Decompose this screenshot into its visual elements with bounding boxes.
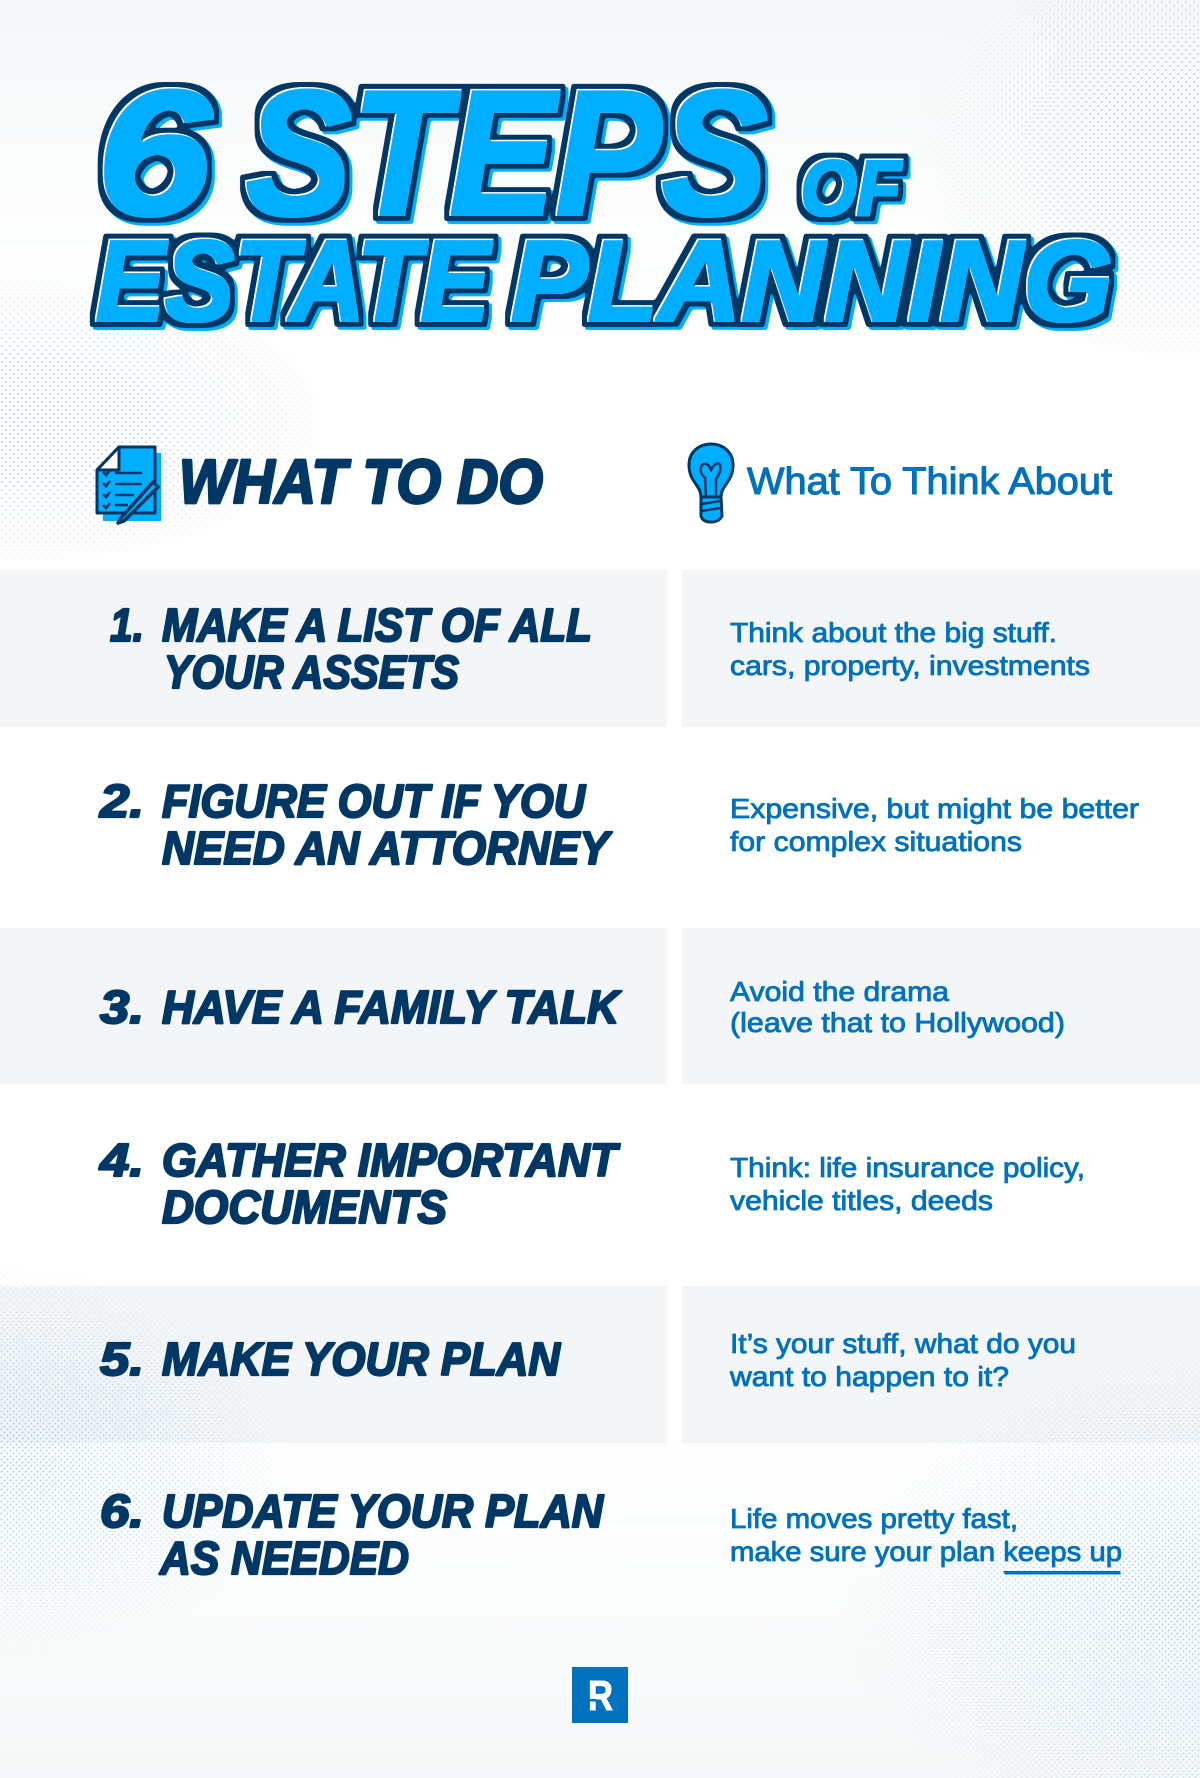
step 2 xyxy=(99,775,613,874)
step 2: FIGURE OUT IF YOU xyxy=(162,775,587,827)
step 4: 4. xyxy=(99,1134,144,1186)
panel: row 1 left xyxy=(0,570,667,727)
step 6: AS NEEDED xyxy=(159,1532,409,1584)
title xyxy=(95,52,1112,345)
logo: R xyxy=(588,1672,613,1719)
heading: what to think about: What To Think About xyxy=(747,461,1112,503)
step 1 note xyxy=(730,617,1090,681)
step 1: YOUR ASSETS xyxy=(164,646,459,698)
panel: row 5 right xyxy=(682,1286,1200,1443)
title: 6 xyxy=(95,52,213,252)
step 6: UPDATE YOUR PLAN xyxy=(162,1485,604,1537)
step 6 xyxy=(100,1485,604,1584)
panel: row 3 left xyxy=(0,928,667,1084)
step 3 note: Avoid the drama xyxy=(730,976,949,1007)
step 4 note: Think: life insurance policy, xyxy=(730,1152,1085,1183)
step 2: 2. xyxy=(99,775,144,827)
step 3: HAVE A FAMILY TALK xyxy=(162,981,622,1033)
step 1: 1. xyxy=(110,599,144,651)
step 1 xyxy=(110,599,592,698)
step 2 note xyxy=(730,793,1139,857)
step 4: GATHER IMPORTANT xyxy=(162,1134,621,1186)
step 1 note: cars, property, investments xyxy=(730,650,1090,681)
logo xyxy=(572,1667,628,1723)
title: STEPS xyxy=(245,52,767,252)
step 3 note: (leave that to Hollywood) xyxy=(730,1007,1065,1038)
step 1 note: Think about the big stuff. xyxy=(730,617,1057,648)
step 2: NEED AN ATTORNEY xyxy=(162,822,613,874)
panel: row 3 right xyxy=(682,928,1200,1084)
step 5 note: want to happen to it? xyxy=(729,1361,1009,1392)
step 4 note: vehicle titles, deeds xyxy=(730,1185,993,1216)
icon: light bulb xyxy=(689,444,733,522)
title: ESTATE xyxy=(95,217,492,345)
title: PLANNING xyxy=(510,217,1112,345)
step 2 note: Expensive, but might be better xyxy=(730,793,1139,824)
step 5 note: It’s your stuff, what do you xyxy=(730,1328,1076,1359)
step 5 note xyxy=(729,1328,1076,1392)
step 4 xyxy=(99,1134,621,1233)
step 6 note: make sure your plan keeps up xyxy=(730,1536,1122,1567)
step 4: DOCUMENTS xyxy=(162,1181,447,1233)
title: OF xyxy=(800,143,902,231)
step 2 note: for complex situations xyxy=(730,826,1022,857)
step 4 note xyxy=(730,1152,1085,1216)
step 3: 3. xyxy=(100,981,144,1033)
step 6 note: Life moves pretty fast, xyxy=(730,1503,1018,1534)
step 6 note xyxy=(730,1503,1122,1574)
step 3 note xyxy=(730,976,1065,1038)
step 5: 5. xyxy=(100,1333,144,1385)
icon: document and pencil xyxy=(97,447,161,523)
step 1: MAKE A LIST OF ALL xyxy=(162,599,592,651)
panel: row 5 left xyxy=(0,1286,667,1443)
step 6: 6. xyxy=(100,1485,144,1537)
heading: what to do: WHAT TO DO xyxy=(179,448,543,517)
step 5: MAKE YOUR PLAN xyxy=(162,1333,561,1385)
panel: row 1 right xyxy=(682,570,1200,727)
